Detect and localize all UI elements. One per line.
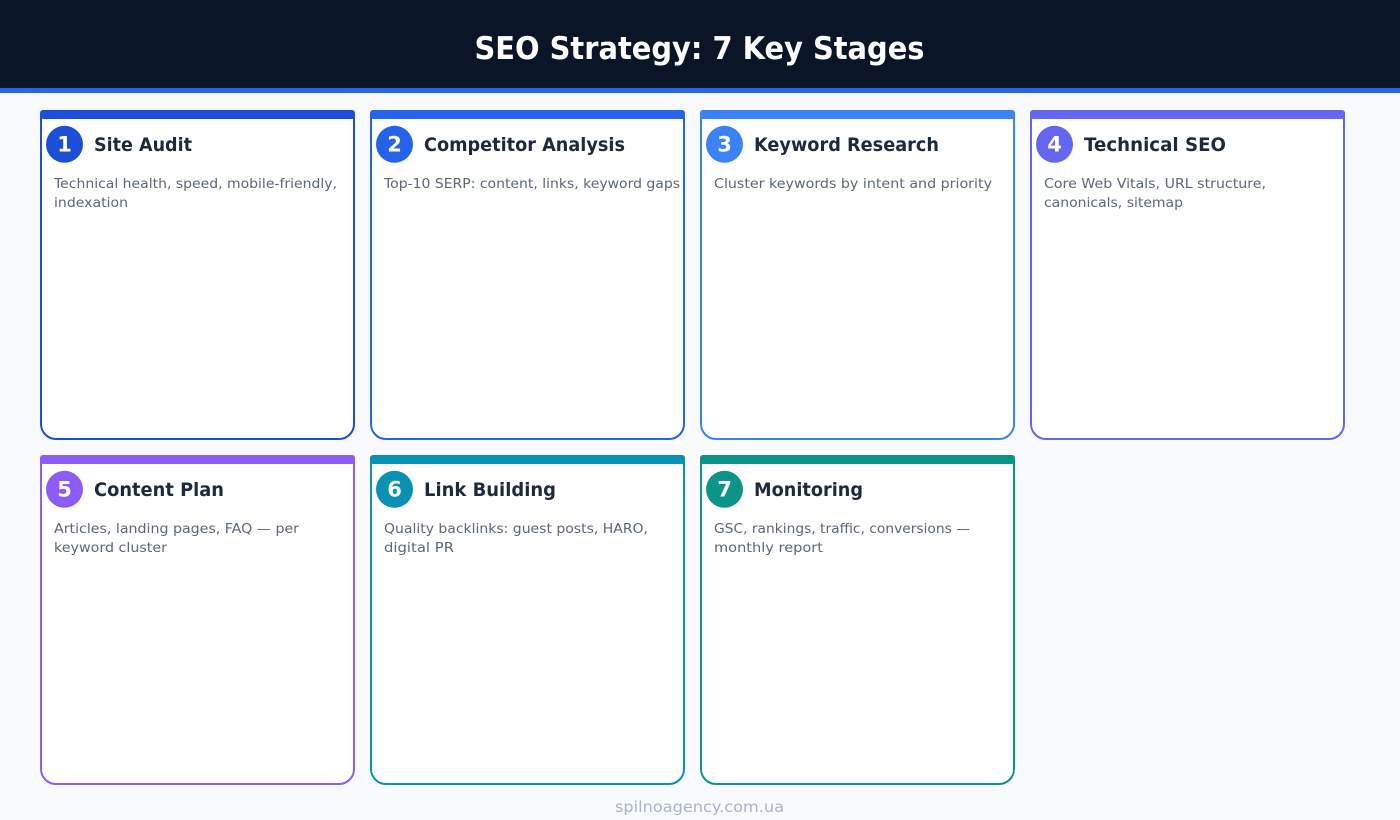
- panel: stage 4 technical seo: 4: [1047, 132, 1062, 156]
- panel: stage 5 content plan: Content Plan: [94, 479, 224, 501]
- panel: stage 7 monitoring: GSC, rankings, traffic, conversions —: [714, 522, 970, 537]
- panel: stage 1 site audit: indexation: [54, 196, 128, 211]
- footer text: spilnoagency.com.ua: [615, 798, 784, 816]
- panel: stage 7 monitoring: [700, 455, 1015, 784]
- panel: stage 4 technical seo: Technical SEO: [1084, 134, 1226, 156]
- panel: stage 6 link building: Quality backlinks: guest posts, HARO,: [384, 522, 648, 537]
- panel: stage 5 content plan: keyword cluster: [54, 541, 168, 556]
- panel: stage 5 content plan: [40, 455, 355, 784]
- panel: stage 5 content plan: 5: [57, 478, 72, 502]
- panel: stage 6 link building: Link Building: [424, 479, 556, 501]
- panel: stage 6 link building: 6: [387, 478, 402, 502]
- panel: stage 7 monitoring: monthly report: [714, 541, 823, 556]
- panel: stage 1 site audit: 1: [57, 132, 72, 156]
- panel: stage 3 keyword research: 3: [717, 132, 732, 156]
- panel: stage 2 competitor analysis: Competitor Analysis: [424, 134, 625, 156]
- panel: stage 1 site audit: Site Audit: [94, 134, 192, 156]
- panel: stage 3 keyword research: [700, 110, 1015, 439]
- header band: [0, 0, 1400, 93]
- panel: stage 1 site audit: [40, 110, 355, 439]
- panel: stage 3 keyword research: Keyword Research: [754, 134, 939, 156]
- panel: stage 4 technical seo: canonicals, sitemap: [1044, 196, 1183, 211]
- panel: stage 2 competitor analysis: 2: [387, 132, 402, 156]
- panel: stage 3 keyword research: Cluster keywords by intent and priority: [714, 177, 992, 192]
- panel: stage 6 link building: [370, 455, 685, 784]
- panel: stage 1 site audit: Technical health, speed, mobile-friendly,: [53, 177, 337, 192]
- panel: stage 4 technical seo: [1030, 110, 1345, 439]
- panel: stage 2 competitor analysis: Top-10 SERP: content, links, keyword gaps: [383, 177, 680, 192]
- panel: stage 2 competitor analysis: [370, 110, 685, 439]
- panel: stage 4 technical seo: Core Web Vitals, URL structure,: [1044, 177, 1266, 192]
- panel: stage 7 monitoring: 7: [717, 478, 732, 502]
- panel: stage 7 monitoring: Monitoring: [754, 479, 863, 501]
- panel: stage 5 content plan: Articles, landing pages, FAQ — per: [54, 522, 300, 537]
- panel: stage 6 link building: digital PR: [384, 541, 454, 556]
- title: SEO Strategy: 7 Key Stages: [474, 31, 924, 67]
